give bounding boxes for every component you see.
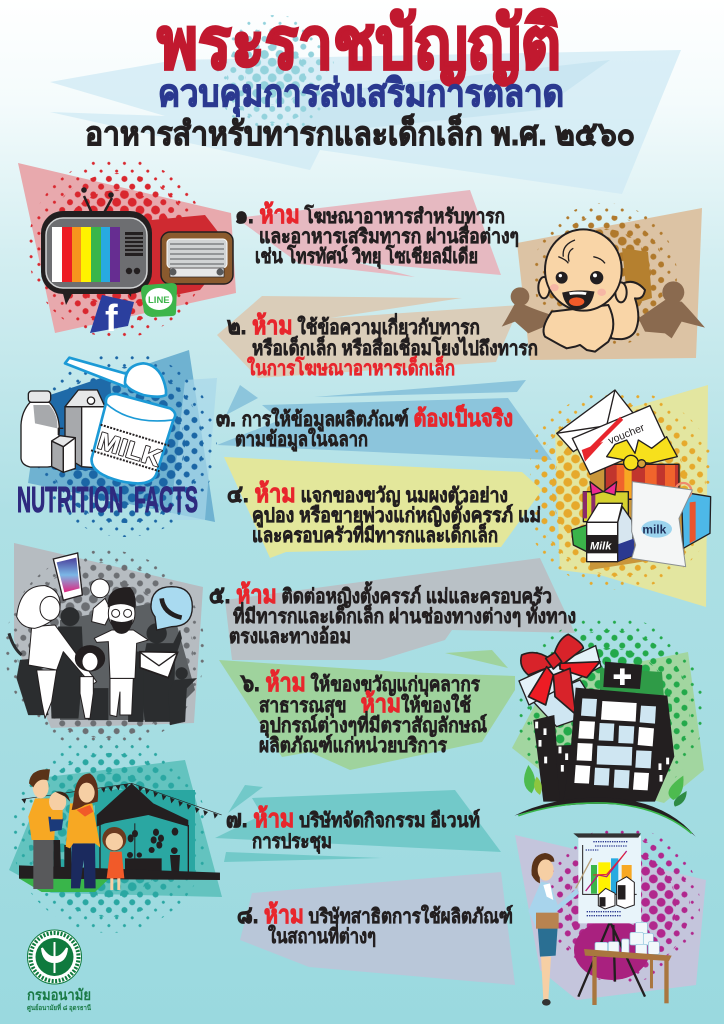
halftone: gold (530, 380, 710, 600)
panel: item 5 (225, 558, 575, 660)
cartons (598, 877, 634, 909)
gift box (519, 646, 601, 727)
green box (572, 525, 587, 552)
panel: demo backdrop (515, 835, 706, 1000)
panel: hospital backdrop (512, 652, 704, 803)
gift box (605, 464, 679, 499)
text block: item 7: ๗. ห้าม บริษัทจัดกิจกรรม อีเวนท์ (226, 805, 480, 833)
carton (65, 390, 105, 468)
panel: family-contact backdrop (14, 543, 203, 728)
phone (53, 553, 82, 600)
text block: item 4: ๔. ห้าม แจกของขวัญ นมผงตัวอย่าง (227, 480, 508, 508)
text block: item 3: ตามข้อมูลในฉลาก (235, 427, 368, 453)
jar label: MILK (94, 428, 165, 473)
text block: item 6 (240, 669, 487, 757)
easel (578, 922, 645, 997)
small gift box (583, 492, 628, 522)
icon: vouchers and gifts: milk (642, 522, 667, 536)
icon: presenter with chart and products (528, 833, 672, 1006)
text block: item 1: ๑. ห้าม โฆษณาอาหารสำหรับทารก (235, 201, 505, 229)
panel: item 3 (217, 380, 552, 460)
text: department name: กรมอนามัย (27, 987, 91, 1004)
panel: event backdrop (9, 760, 222, 897)
text block: item 4: และครอบครัวที่มีทารกและเด็กเล็ก (252, 520, 498, 547)
halftone: magenta (540, 830, 700, 985)
halftone: teal (14, 740, 204, 933)
milk carton (618, 507, 634, 562)
icon: baby (502, 229, 705, 352)
subtitle: ควบคุมการส่งเสริมการตลาด (158, 73, 564, 117)
halftone: gold-brown (535, 203, 677, 344)
icon: people with phone, call and mail (9, 553, 197, 725)
table (584, 949, 672, 1005)
icon: television (41, 187, 152, 305)
text: regional centre: ศูนย์อนามัยที่ ๘ อุดรธานี (27, 1002, 91, 1013)
solid gold patch behind baby (622, 248, 652, 306)
text block: item 5: ที่มีทารกและเด็กเล็ก ผ่านช่องทางต่างๆ ทั้งทาง (233, 601, 576, 628)
hill edge (518, 803, 692, 833)
trees (524, 765, 687, 807)
panel: item 6 (219, 650, 515, 770)
board top (573, 833, 641, 838)
text block: item 6: ผลิตภัณฑ์แก่หน่วยบริการ (259, 734, 447, 757)
text block: item 2: ๒. ห้าม ใช้ข้อความเกี่ยวกับทารก (227, 312, 480, 340)
woman (528, 853, 592, 1006)
icon: hospital with ribbon (514, 634, 696, 837)
text block: item 2: ในการโฆษณาอาหารเด็กเล็ก (247, 355, 455, 380)
envelope (557, 390, 633, 452)
sign (603, 662, 642, 689)
title: พระราชบัญญัติ (157, 4, 561, 86)
baby head (538, 229, 627, 311)
text block: item 2 (227, 312, 538, 380)
silhouettes with balloons (53, 828, 180, 873)
bunting (22, 783, 222, 819)
text block: item 8: ในสถานที่ต่างๆ (268, 921, 376, 948)
panel: nutrition backdrop (28, 350, 217, 522)
jars (595, 922, 659, 955)
solid grey patch behind people (60, 600, 195, 720)
bow (607, 437, 677, 463)
milk bag (632, 482, 692, 567)
icon: milk products (21, 358, 175, 483)
text block: item 3 (216, 403, 513, 453)
text block: item 5 (209, 581, 576, 648)
solid red blob behind tv (130, 215, 232, 300)
woman (66, 773, 100, 888)
icon: vouchers and gifts: Milk (590, 541, 612, 553)
cross (614, 668, 631, 685)
ground (19, 865, 220, 880)
panel: item 8 (240, 872, 515, 985)
icon: vouchers and gifts (557, 390, 711, 567)
bottle (21, 391, 59, 467)
panel: title backdrop (50, 50, 681, 194)
halftone: red (29, 162, 196, 336)
icon: line (141, 283, 177, 317)
panel: baby backdrop (517, 208, 702, 360)
text block: item 5: ๕. ห้าม ติดต่อหญิงตั้งครรภ์ แม่และครอบครัว (209, 581, 552, 609)
panel: item 4 (224, 457, 542, 558)
ribbon (521, 634, 600, 714)
halftone: green (519, 620, 702, 778)
man (28, 769, 55, 889)
baby legs and body (543, 282, 645, 352)
main building (563, 688, 674, 802)
call bubble (151, 587, 192, 630)
panel: media backdrop (18, 163, 236, 333)
panel: item 1 (236, 190, 501, 277)
tent (97, 783, 189, 872)
girl (102, 827, 126, 890)
halftone: grey (6, 550, 204, 748)
side towers (533, 715, 561, 802)
text block: item 1: เช่น โทรทัศน์ วิทยุ โซเชียลมีเดีย (255, 244, 478, 269)
text block: item 7 (226, 805, 480, 854)
toddler (48, 791, 70, 832)
text block: item 1: และอาหารเสริมทารก ผ่านสื่อต่างๆ (259, 221, 519, 248)
text block: item 8: ๘. ห้าม บริษัทสาธิตการใช้ผลิตภัณฑ์ (237, 901, 513, 929)
text block: item 6: สาธารณสุข ห้ามให้ของใช้ (259, 690, 471, 718)
woman (17, 586, 97, 718)
crowd silhouettes (9, 607, 197, 725)
hill (514, 798, 696, 837)
halftone: blue (38, 356, 217, 537)
text block: item 6: อุปกรณ์ต่างๆที่มีตราสัญลักษณ์ (259, 710, 487, 738)
icon: line: LINE (148, 295, 170, 306)
board (578, 836, 641, 923)
icon: facebook: f (105, 298, 118, 340)
solid blue behind products (50, 375, 115, 470)
chart (583, 842, 637, 916)
icon: facebook (90, 295, 134, 340)
envelope (140, 652, 178, 678)
text block: item 6: ๖. ห้าม ให้ของขวัญแก่บุคลากร (240, 669, 480, 697)
panel: item 7 (215, 785, 501, 862)
child (75, 646, 105, 718)
text: nutrition facts: NUTRITION FACTS (17, 479, 198, 520)
toddler (91, 579, 112, 625)
icon: family at event (19, 769, 222, 892)
solid green behind hospital (600, 668, 668, 750)
icon: vouchers and gifts: voucher (607, 422, 647, 447)
subtitle second line: อาหารสำหรับทารกและเด็กเล็ก พ.ศ. ๒๕๖๐ (85, 113, 635, 152)
jar (92, 394, 175, 483)
text block: item 2: หรือเด็กเล็ก หรือสื่อเชื่อมโยงไปถึงทารก (252, 333, 538, 360)
blue box (682, 493, 711, 548)
text block: item 4 (227, 480, 541, 547)
brown baby silhouettes (502, 281, 705, 338)
solid gold behind gifts (590, 462, 685, 570)
solid teal behind tent (95, 790, 195, 875)
text block: item 5: ตรงและทางอ้อม (229, 625, 351, 648)
man (94, 588, 148, 717)
text block: item 4: คูปอง หรือขายพ่วงแก่หญิงตั้งครรภ์ แม่ (252, 500, 541, 529)
text block: item 7: การประชุม (252, 831, 332, 854)
icon: radio (161, 232, 233, 284)
text block: item 8 (237, 901, 513, 948)
text block: item 3: ๓. การให้ข้อมูลผลิตภัณฑ์ ต้องเป็นจริง (216, 403, 513, 433)
solid magenta core (574, 920, 650, 980)
panel: gifts backdrop (555, 385, 708, 607)
text block: item 1 (235, 201, 519, 269)
grass (19, 878, 108, 892)
scoop (65, 358, 166, 397)
windows (537, 698, 668, 790)
small carton (52, 428, 75, 472)
voucher (572, 406, 667, 474)
halftone: title (216, 15, 334, 134)
panel: item 2 (217, 296, 520, 378)
logo: department of health (28, 930, 82, 984)
